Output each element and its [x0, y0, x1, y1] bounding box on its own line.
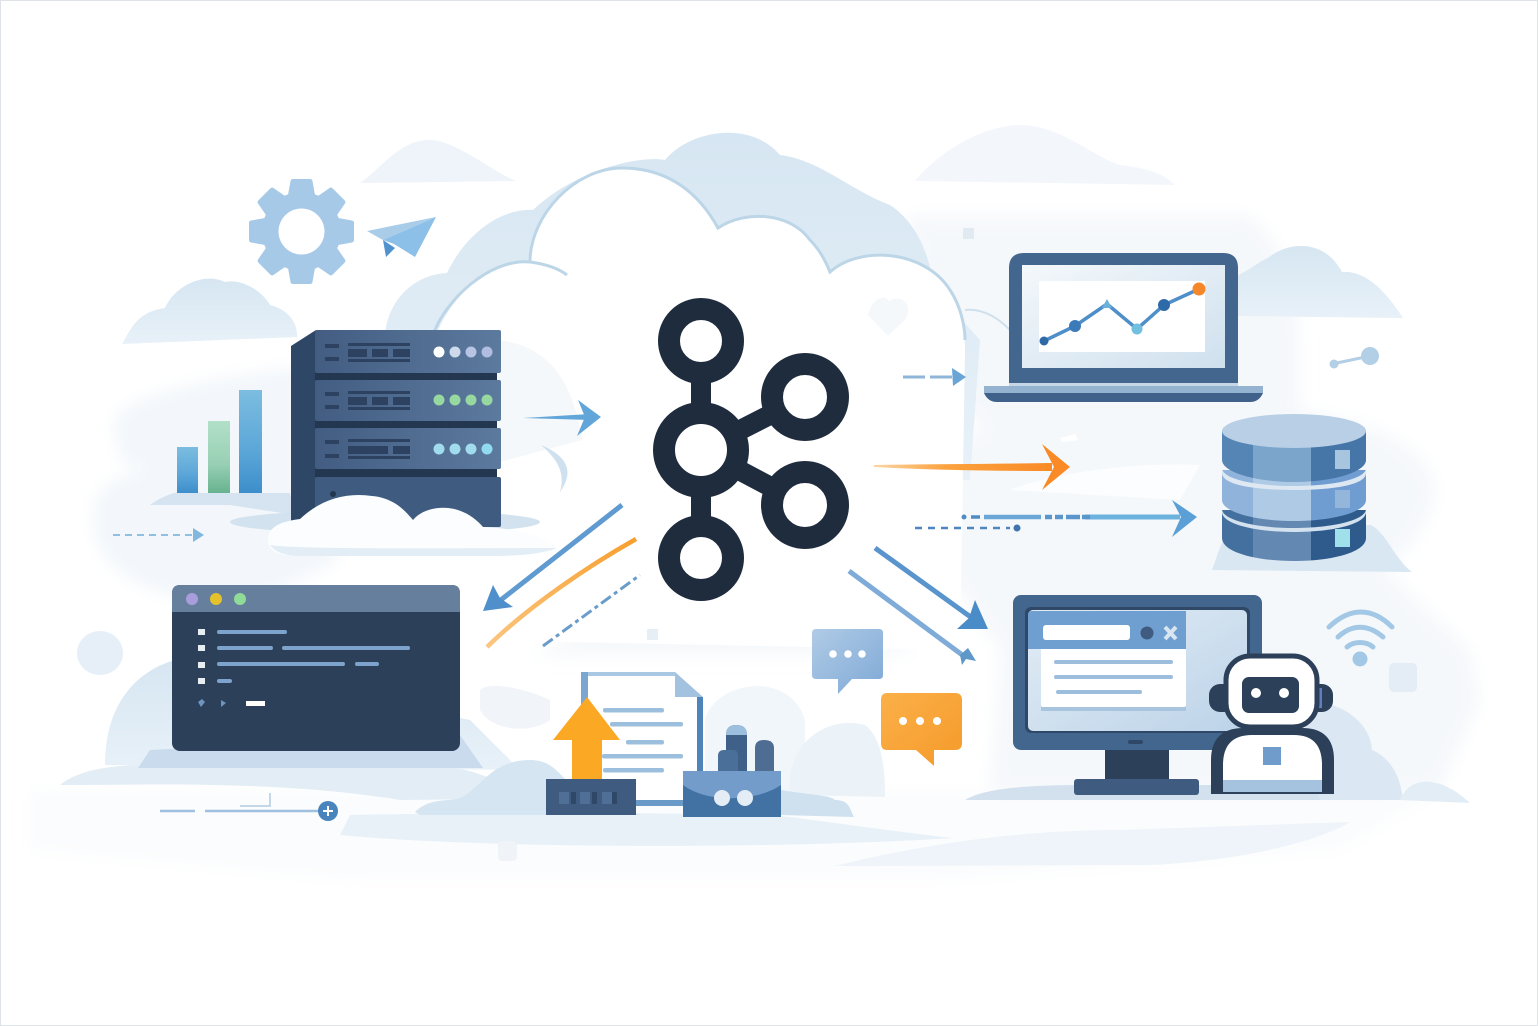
arrow: dashed — [543, 575, 640, 646]
icon: upload arrow — [553, 697, 620, 780]
background clouds — [30, 125, 1480, 880]
connector line bottom — [160, 793, 338, 821]
arrow: hub to monitor lower — [849, 571, 976, 665]
arrow: hub to monitor upper — [875, 548, 988, 629]
shadow under server — [230, 510, 540, 534]
icon: paper plane — [367, 217, 436, 257]
arrow: hub to terminal orange — [487, 539, 636, 647]
cloud under server — [268, 495, 557, 556]
arrow: small to laptop — [903, 368, 966, 386]
server rack — [291, 330, 501, 527]
chat bubble: blue — [812, 629, 883, 694]
arrow: hub to terminal blue — [483, 505, 622, 611]
kafka logo — [664, 309, 838, 590]
dashed arrow left — [113, 528, 204, 542]
database — [1222, 414, 1366, 561]
curl decoration — [541, 445, 568, 492]
arrow: server to hub — [523, 400, 601, 436]
arrow: orange to right — [874, 444, 1070, 490]
robot — [1209, 656, 1334, 794]
icon: wifi — [1329, 612, 1392, 666]
icon: gear — [252, 182, 352, 282]
decorative small squares — [498, 228, 1417, 861]
laptop with chart — [984, 253, 1263, 402]
factory device right — [683, 725, 781, 817]
arrow: dashed to database — [915, 500, 1197, 537]
chat bubble: orange — [881, 693, 962, 766]
connector node right — [1330, 347, 1379, 368]
bar chart — [150, 390, 295, 515]
terminal window — [138, 585, 483, 768]
device box left — [546, 779, 636, 815]
document with text lines — [581, 672, 703, 806]
monitor — [1013, 595, 1262, 795]
